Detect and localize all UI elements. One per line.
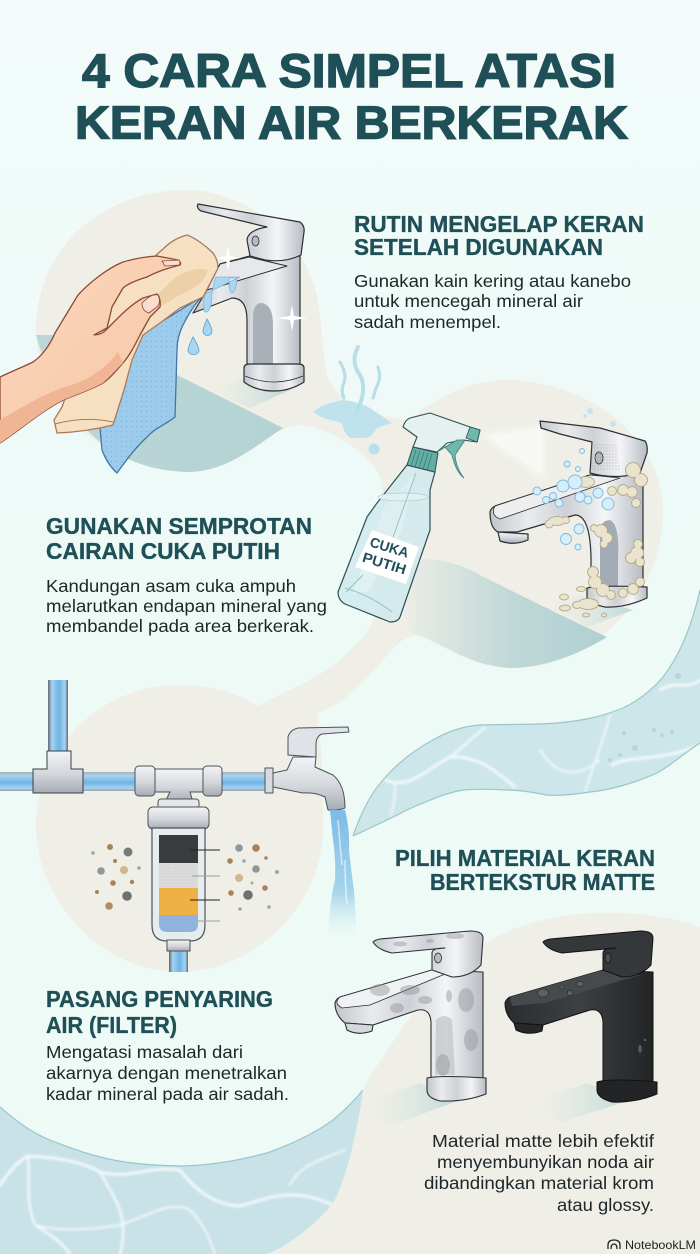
title — [75, 45, 628, 148]
text: step 4 — [424, 1131, 654, 1215]
beige corner shape bottom right — [267, 913, 700, 1254]
tap — [265, 727, 349, 810]
illustration: faucet with limescale and bubbles — [490, 408, 647, 627]
water beads — [538, 982, 646, 1054]
text: step 4: menyembunyikan noda air — [437, 1152, 654, 1172]
heading: step 4: BERTEKSTUR MATTE — [430, 869, 655, 895]
text: step 2: Kandungan asam cuka ampuh — [46, 576, 296, 596]
heading: step 1: SETELAH DIGUNAKAN — [354, 234, 603, 260]
sparkles — [215, 245, 308, 331]
text: step 3: akarnya dengan menetralkan — [46, 1063, 287, 1083]
illustration: hand wiping faucet with cloth — [0, 204, 308, 473]
limescale deposits — [546, 463, 647, 616]
illustration: spray bottle CUKA PUTIH — [338, 413, 545, 622]
label: CUKA — [368, 534, 411, 561]
illustration: black matte faucet — [505, 931, 657, 1123]
NotebookLM watermark: NotebookLM — [625, 1238, 696, 1252]
trigger — [437, 440, 465, 478]
water stream — [328, 810, 357, 937]
tan cloth — [54, 235, 218, 433]
water pool bottom left — [0, 1090, 363, 1254]
illustration: chrome faucet with fingerprints — [335, 931, 486, 1127]
filter head fittings — [135, 766, 222, 829]
text: step 2 — [46, 576, 327, 636]
label — [355, 530, 419, 584]
text: step 1: untuk mencegah mineral air — [354, 291, 583, 311]
water drops — [188, 319, 212, 355]
water ribbon right — [353, 590, 700, 836]
text: step 1: sadah menempel. — [354, 312, 501, 332]
puddle and steam — [313, 347, 392, 454]
teal floor: step 2 — [395, 559, 607, 668]
heading: step 1: RUTIN MENGELAP KERAN — [354, 211, 644, 237]
text: step 4: atau glossy. — [557, 1195, 654, 1215]
heading: step 2: CAIRAN CUKA PUTIH — [46, 538, 280, 564]
text: step 3: Mengatasi masalah dari — [46, 1042, 243, 1062]
fingerprints — [370, 933, 478, 1076]
chrome faucet — [490, 421, 647, 607]
faucet shadow — [207, 377, 290, 408]
title: 4 CARA SIMPEL ATASI — [82, 45, 616, 98]
hand — [0, 256, 181, 443]
heading: step 1 — [354, 211, 644, 260]
text: step 2: melarutkan endapan mineral yang — [46, 596, 327, 616]
beige flowing background shape — [36, 190, 663, 972]
water on spout — [204, 277, 240, 312]
mineral particles right — [227, 844, 279, 911]
text: step 2: membandel pada area berkerak. — [46, 616, 314, 636]
mineral particles left — [91, 844, 141, 910]
heading: step 4 — [395, 845, 655, 895]
spray mist — [480, 425, 545, 480]
text: step 1 — [354, 271, 631, 332]
filter layers — [159, 835, 198, 932]
filter housing — [152, 828, 205, 941]
teal floor: step 1 — [36, 335, 283, 472]
heading: step 4: PILIH MATERIAL KERAN — [395, 845, 655, 871]
heading: step 3: AIR (FILTER) — [46, 1012, 177, 1038]
collar — [407, 447, 438, 472]
title: KERAN AIR BERKERAK — [75, 96, 628, 148]
bottle body — [338, 465, 435, 622]
label: PUTIH — [361, 549, 408, 577]
heading: step 2: GUNAKAN SEMPROTAN — [46, 513, 312, 539]
heading: step 3 — [46, 986, 273, 1038]
faucet shadow — [550, 595, 633, 627]
heading: step 3: PASANG PENYARING — [46, 986, 273, 1012]
chrome faucet clean — [193, 204, 304, 391]
text: step 3 — [46, 1042, 289, 1104]
text: step 4: Material matte lebih efektif — [432, 1131, 654, 1151]
text: step 4: dibandingkan material krom — [424, 1173, 654, 1193]
spray head — [403, 413, 480, 452]
filter leader lines — [190, 850, 220, 921]
pipes — [48, 680, 68, 755]
illustration: water filter on pipes — [0, 680, 357, 972]
text: step 1: Gunakan kain kering atau kanebo — [354, 271, 631, 291]
T joint — [33, 751, 83, 793]
blue cloth — [100, 296, 203, 473]
foam bubbles — [533, 448, 614, 550]
text: step 3: kadar mineral pada air sadah. — [46, 1084, 289, 1104]
heading: step 2 — [46, 513, 312, 564]
